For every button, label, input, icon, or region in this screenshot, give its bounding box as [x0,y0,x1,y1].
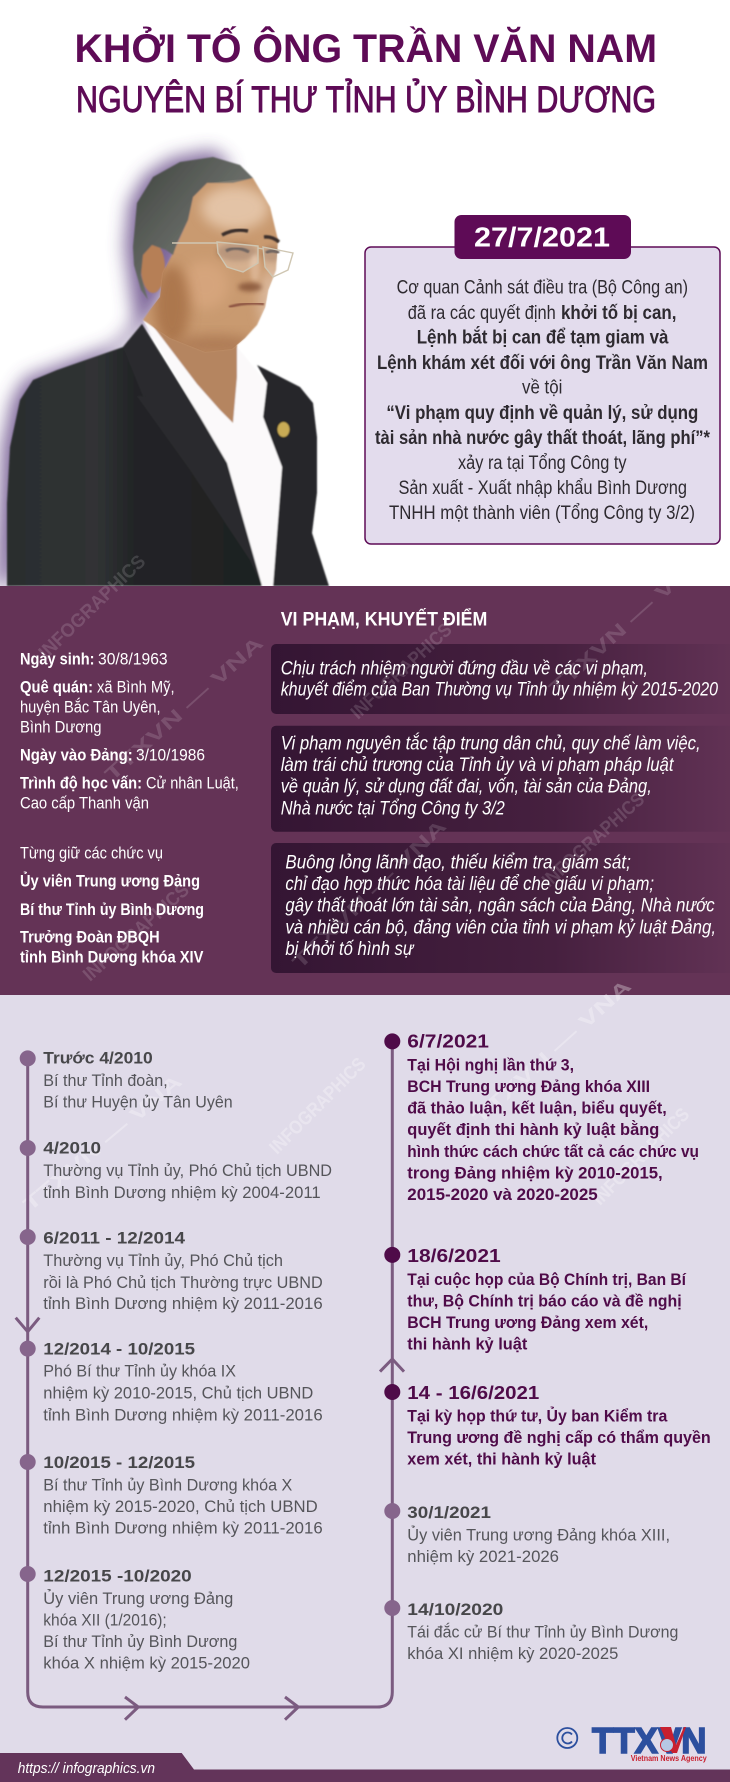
violation box 2: Nhà nước tại Tổng Công ty 3/2 [281,798,505,819]
entry: 30/1/2021: nhiệm kỳ 2021-2026 [407,1547,559,1566]
entry: 12/2014 - 10/2015: 12/2014 - 10/2015 [43,1340,195,1359]
entry: 14 - 16/6/2021: Tại kỳ họp thứ tư, Ủy ban Kiểm tra [407,1406,668,1425]
violation box 3 [271,843,730,973]
timeline right column [384,1031,711,1663]
entry: 30/1/2021: Ủy viên Trung ương Đảng khóa XIII, [407,1526,670,1545]
entry: 6/2011 - 12/2014: rồi là Phó Chủ tịch Thường trực UBND [43,1273,323,1292]
panel text: xảy ra tại Tổng Công ty [458,453,627,474]
entry: 6/7/2021: quyết định thi hành kỷ luật bằng [407,1120,659,1139]
education: Trình độ học vấn: [20,774,142,793]
head [133,157,278,352]
violation box 3: Buông lỏng lãnh đạo, thiếu kiểm tra, giám sát; [285,852,631,873]
eyebrows [222,230,279,242]
entry: 12/2015 - 10/2020: khóa XII (1/2016); [43,1610,167,1629]
arrow: right 1 [125,1697,138,1720]
entry: 12/2015 - 10/2020 [20,1566,250,1672]
eyes [226,248,279,253]
party admission date [20,745,205,764]
positions held: Bí thư Tỉnh ủy Bình Dương [20,900,204,919]
birth date [20,649,168,668]
entry: 6/2011 - 12/2014 [20,1228,323,1313]
hometown: Bình Dương [20,717,102,736]
entry: 6/2011 - 12/2014: tỉnh Bình Dương nhiệm kỳ 2011-2016 [43,1294,323,1313]
violation box 2 [271,726,730,832]
timeline connector line [16,1041,404,1720]
arrow: right 2 [285,1697,298,1720]
lapel pin [277,422,290,438]
entry: 18/6/2021: thi hành kỷ luật [407,1335,528,1354]
profile facts [20,649,239,967]
entry: 6/7/2021: 2015-2020 và 2020-2025 [407,1185,598,1204]
band watermarks: INFOGRAPHICS [538,789,649,892]
panel text: Cơ quan Cảnh sát điều tra (Bộ Công an) [397,278,688,299]
timeline watermarks [20,976,694,1216]
timeline panel background [0,995,730,1782]
entry: 4/2010 [20,1139,332,1202]
entry: 18/6/2021: 18/6/2021 [407,1246,501,1266]
entry: 14 - 16/6/2021 [384,1383,711,1468]
band watermarks [35,547,712,986]
entry: 12/2015 - 10/2020: Bí thư Tỉnh ủy Bình Dương [43,1632,237,1651]
arrow: down [16,1318,39,1332]
entry: 14 - 16/6/2021: 14 - 16/6/2021 [407,1383,539,1403]
logo tagline: Vietnam News Agency [631,1754,707,1763]
education [20,774,239,813]
entry: 14 - 16/6/2021: Trung ương đề nghị cấp có thẩm quyền [407,1428,711,1447]
title [74,25,657,120]
violations section [271,609,730,973]
hometown [20,678,175,736]
portrait glow [0,150,230,586]
hometown: huyện Bắc Tân Uyên, [20,698,161,717]
entry: before 4/2010: Bí thư Huyện ủy Tân Uyên [43,1093,233,1112]
entry: 12/2014 - 10/2015: nhiệm kỳ 2010-2015, Chủ tịch UBND [43,1384,313,1402]
entry: 10/2015 - 12/2015: nhiệm kỳ 2015-2020, Chủ tịch UBND [43,1497,318,1516]
entry: 30/1/2021: 30/1/2021 [407,1503,491,1522]
violation box 1: Chịu trách nhiệm người đứng đầu về các vi phạm, [281,658,648,679]
violation box 2: về quản lý, sử dụng đất đai, vốn, tài sản của Đảng, [281,777,652,798]
band watermarks: INFOGRAPHICS [79,880,194,986]
party admission date: Ngày vào Đảng: [20,745,133,764]
entry: 4/2010: tỉnh Bình Dương nhiệm kỳ 2004-2011 [43,1183,321,1202]
positions held: Trưởng Đoàn ĐBQH [20,928,160,947]
entry: 12/2015 - 10/2020: khóa X nhiệm kỳ 2015-2020 [43,1653,250,1672]
logo red V accent [660,1727,686,1753]
glasses [172,242,293,277]
entry: 12/2014 - 10/2015: Phó Bí thư Tỉnh ủy khóa IX [43,1362,236,1381]
nose [238,254,262,292]
entry: 18/6/2021: Tại cuộc họp của Bộ Chính trị, Ban Bí [407,1270,687,1289]
entry: 6/7/2021 [384,1031,699,1204]
entry: 12/2014 - 10/2015 [20,1340,323,1424]
jacket [7,318,329,586]
portrait photo illustration [0,150,329,586]
positions held [20,843,204,967]
facial shading [154,186,282,355]
panel text: “Vi phạm quy định về quản lý, sử dụng [386,403,698,424]
timeline watermarks: INFOGRAPHICS [589,1104,694,1210]
entry: 10/2015 - 12/2015: Bí thư Tỉnh ủy Bình Dương khóa X [43,1475,292,1494]
jacket right side [257,365,329,586]
band watermarks: TTXVN — VNA [545,547,712,700]
band watermarks: TTXVN — VNA [101,633,268,786]
entry: 14/10/2020: 14/10/2020 [407,1600,503,1619]
entry: 4/2010: 4/2010 [43,1139,101,1158]
purple profile band [0,586,730,995]
entry: 6/7/2021: hình thức cách chức tất cả các chức vụ [407,1142,699,1161]
panel text: Sản xuất - Xuất nhập khẩu Bình Dương [398,478,687,499]
entry: 10/2015 - 12/2015 [20,1453,323,1538]
face [143,178,278,352]
panel text: về tội [522,378,562,399]
copyright symbol [557,1728,577,1748]
date badge [454,215,631,259]
birth date: 30/8/1963 [98,649,168,668]
entry: before 4/2010: Bí thư Tỉnh đoàn, [43,1071,168,1090]
party admission date: 3/10/1986 [136,745,205,764]
timeline watermarks: INFOGRAPHICS [266,1054,370,1159]
positions held: tỉnh Bình Dương khóa XIV [20,948,204,967]
entry: 6/7/2021: trong Đảng nhiệm kỳ 2010-2015, [407,1164,663,1183]
entry: 14/10/2020: khóa XI nhiệm kỳ 2020-2025 [407,1644,618,1663]
entry: before 4/2010: Trước 4/2010 [43,1048,153,1067]
callout panel: 27/7/2021 [365,215,720,544]
entry: 14/10/2020 [384,1600,678,1663]
violation box 3: chỉ đạo hợp thức hóa tài liệu để che giấu vi phạm; [285,874,654,895]
positions held: Ủy viên Trung ương Đảng [20,872,200,891]
band watermarks: INFOGRAPHICS [35,551,150,664]
hometown: xã Bình Mỹ, [97,678,175,697]
panel body [365,247,720,544]
violations heading: VI PHẠM, KHUYẾT ĐIỂM [281,609,487,631]
entry: 12/2015 - 10/2020: Ủy viên Trung ương Đảng [43,1589,233,1608]
entry: 6/2011 - 12/2014: 6/2011 - 12/2014 [43,1228,186,1247]
education: Cao cấp Thanh vận [20,794,149,813]
entry: 6/2011 - 12/2014: Thường vụ Tỉnh ủy, Phó Chủ tịch [43,1251,283,1270]
TTXVN logo [557,1720,707,1763]
shirt [143,320,282,586]
entry: before 4/2010 [20,1048,233,1112]
timeline left column [20,1048,332,1672]
date: 27/7/2021 [474,222,610,253]
panel text [375,278,711,524]
hometown: Quê quán: [20,678,93,697]
entry: 18/6/2021: thư, Bộ Chính trị báo cáo và đề nghị [407,1292,682,1311]
arrow: up [380,1359,404,1372]
entry: 6/7/2021: đã thảo luận, kết luận, biểu quyết, [407,1099,667,1118]
entry: 6/7/2021: Tại Hội nghị lần thứ 3, [407,1055,574,1074]
panel text: Lệnh bắt bị can để tạm giam và [417,327,669,349]
violation box 1 [271,644,730,714]
positions held: Từng giữ các chức vụ [20,843,163,862]
entry: 10/2015 - 12/2015: tỉnh Bình Dương nhiệm kỳ 2011-2016 [43,1519,323,1538]
entry: 10/2015 - 12/2015: 10/2015 - 12/2015 [43,1453,195,1472]
entry: 18/6/2021 [384,1246,687,1354]
band watermarks: INFOGRAPHICS [347,620,456,724]
lapel [123,324,262,586]
violation box 2: làm trái chủ trương của Tỉnh ủy và vi phạm pháp luật [281,755,674,776]
entry: 30/1/2021 [384,1503,670,1566]
footer bar [0,1753,730,1782]
panel text: khởi tố bị can, [561,303,676,324]
panel text: TNHH một thành viên (Tổng Công ty 3/2) [389,503,695,524]
timeline watermarks: TTXVN — VNA [469,976,636,1129]
hair [133,157,253,300]
logo wordmark: TTXVN [592,1720,706,1761]
footer url: https:// infographics.vn [18,1760,155,1777]
entry: 14 - 16/6/2021: xem xét, thi hành kỷ luật [407,1449,596,1468]
neck skin [147,318,237,423]
entry: 14/10/2020: Tái đắc cử Bí thư Tỉnh ủy Bình Dương [407,1622,678,1641]
entry: 18/6/2021: BCH Trung ương Đảng xem xét, [407,1313,648,1332]
panel text: đã ra các quyết định [408,303,556,324]
title line 1: KHỞI TỐ ÔNG TRẦN VĂN NAM [74,25,657,71]
entry: 12/2015 - 10/2020: 12/2015 -10/2020 [43,1567,192,1586]
entry: 6/7/2021: 6/7/2021 [407,1031,489,1051]
mouth [229,303,264,307]
entry: 6/7/2021: BCH Trung ương Đảng khóa XIII [407,1077,650,1096]
entry: 12/2014 - 10/2015: tỉnh Bình Dương nhiệm kỳ 2011-2016 [43,1405,323,1424]
violation box 3: bị khởi tố hình sự [285,939,415,960]
band watermarks: TTXVN — VNA [289,816,451,974]
logo globe [660,1738,674,1752]
birth date: Ngày sinh: [20,649,94,668]
ear [141,243,165,293]
education: Cử nhân Luật, [146,774,239,793]
entry: 4/2010: Thường vụ Tỉnh ủy, Phó Chủ tịch UBND [43,1161,332,1180]
timeline watermarks: TTXVN — VNA [20,1071,187,1216]
